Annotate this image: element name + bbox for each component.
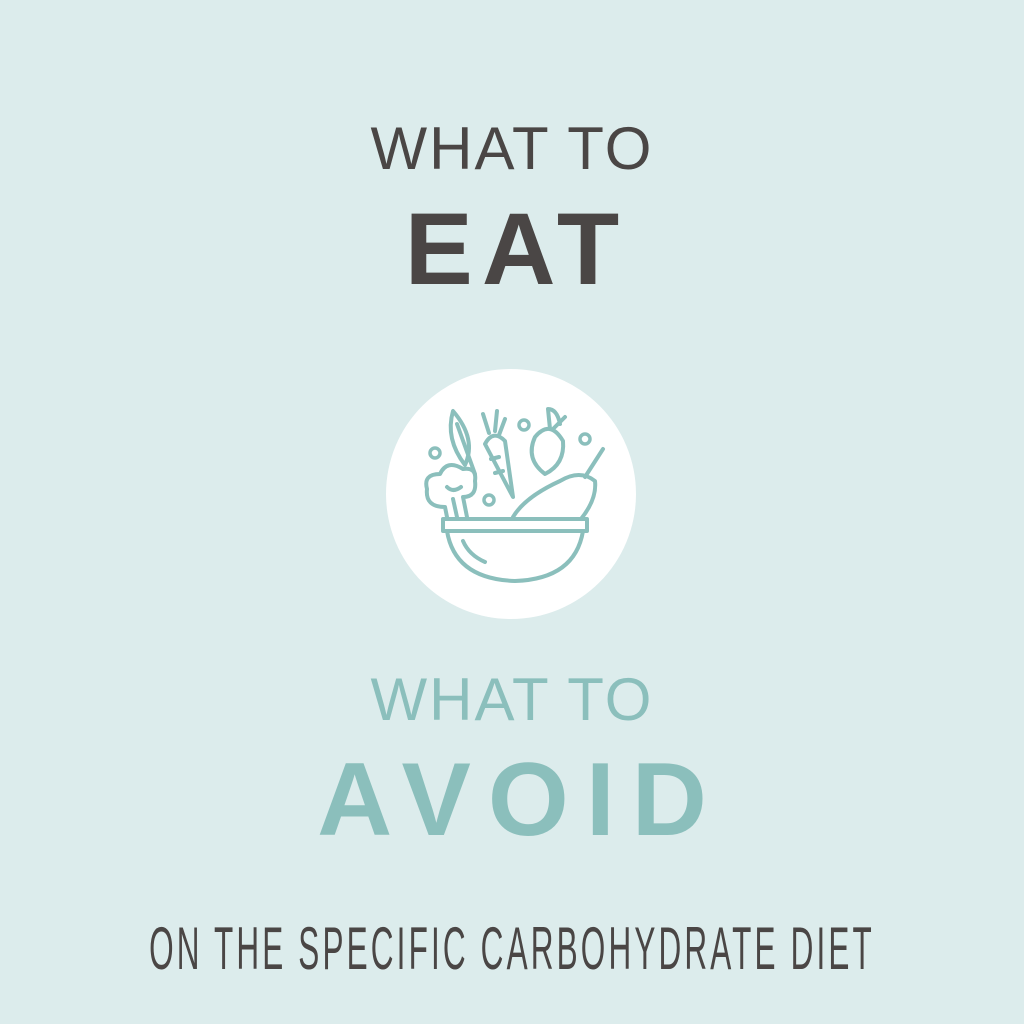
heading line: EAT: EAT xyxy=(405,192,628,306)
heading line: WHAT TO: WHAT TO xyxy=(371,666,653,733)
heading: what to avoid xyxy=(317,666,724,858)
bowl xyxy=(443,519,587,531)
carrot xyxy=(485,436,513,497)
heading line: WHAT TO: WHAT TO xyxy=(371,115,653,182)
icon: salad bowl in white circle xyxy=(386,369,636,619)
beet xyxy=(532,429,563,474)
dots xyxy=(430,448,440,458)
eggplant xyxy=(513,475,595,519)
subtitle: ON THE SPECIFIC CARBOHYDRATE DIET xyxy=(149,915,875,982)
heading: what to eat xyxy=(370,115,653,306)
heading line: AVOID: AVOID xyxy=(317,742,724,858)
leaf xyxy=(451,411,475,474)
broccoli xyxy=(426,465,475,517)
